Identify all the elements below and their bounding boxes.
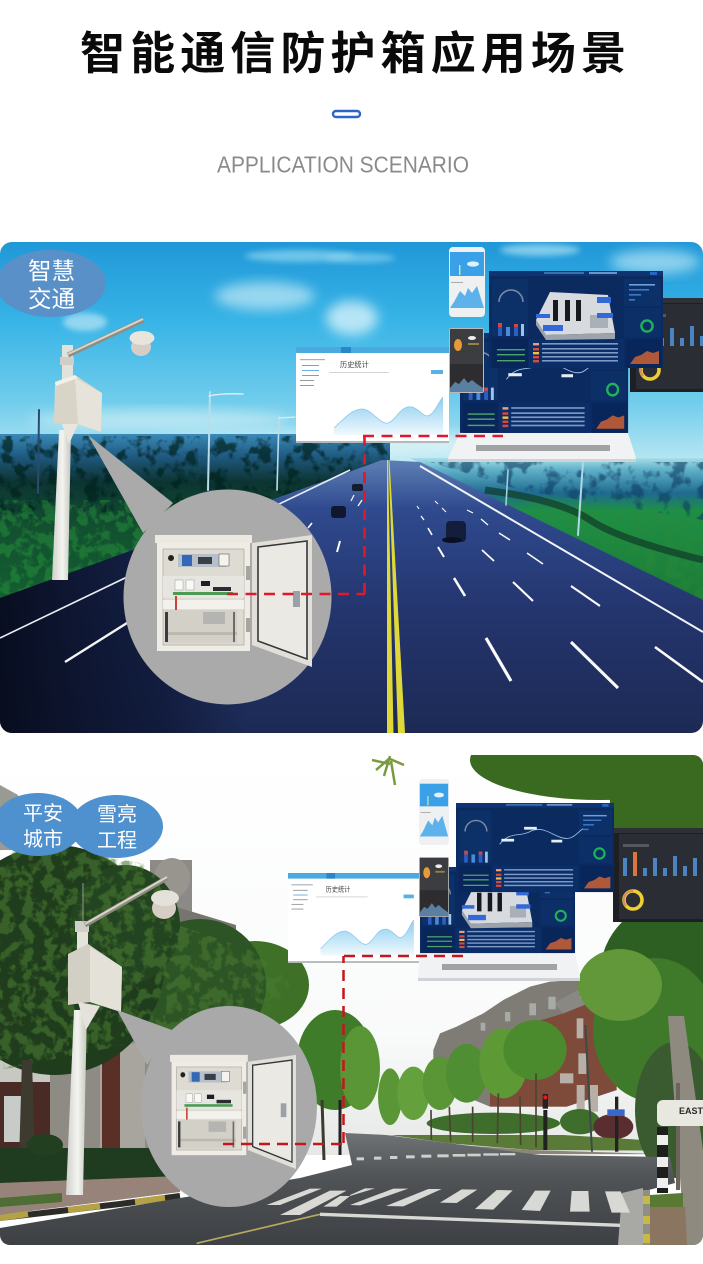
magnifier callout with cabinet xyxy=(117,1006,317,1207)
red dashed connection xyxy=(223,956,464,1144)
road markings xyxy=(0,460,703,733)
phone with chart xyxy=(449,247,485,317)
magnifier callout with cabinet xyxy=(88,435,332,704)
panel: smart traffic scene xyxy=(0,242,703,733)
highway road surface xyxy=(0,460,703,733)
speech bubble: snow bright project: 雪亮 xyxy=(97,803,137,826)
right row of trees xyxy=(378,1020,670,1154)
bright sky xyxy=(306,1048,645,1155)
left field and trees xyxy=(0,434,390,604)
dark monitor xyxy=(630,298,703,392)
crosswalk and road lines xyxy=(197,1153,630,1243)
upper dashboard xyxy=(456,803,614,892)
phone with alarm xyxy=(449,328,484,393)
speech bubble: smart traffic xyxy=(0,250,106,317)
street lamps xyxy=(38,392,583,535)
left building xyxy=(0,785,240,1160)
speech bubble: safe city: 平安 xyxy=(23,802,63,825)
sky with clouds xyxy=(0,242,703,472)
phone with alarm xyxy=(419,857,449,917)
decorative blue pill xyxy=(333,111,360,117)
laptop base xyxy=(418,953,580,981)
speech bubble: snow bright project: 工程 xyxy=(97,829,137,852)
software screens group 2 xyxy=(288,779,703,981)
far brick building with dormers xyxy=(433,980,617,1112)
title: 智能通信防护箱应用场景 xyxy=(80,28,626,79)
mid left tree by the callout xyxy=(297,1010,380,1160)
subtitle: APPLICATION SCENARIO xyxy=(217,152,469,178)
speech bubble: safe city xyxy=(0,793,83,856)
vehicles on highway xyxy=(331,484,466,543)
phone with chart xyxy=(419,779,449,845)
right field and trees xyxy=(410,458,703,604)
speech bubble: snow bright project xyxy=(70,795,163,858)
hedge and pavement xyxy=(0,1134,180,1218)
dark monitor xyxy=(613,828,703,922)
speech bubble: smart traffic: 智慧 xyxy=(28,258,75,284)
big tree at right xyxy=(372,720,703,1245)
camera pole with enclosure xyxy=(66,877,179,1195)
laptop dashboard xyxy=(460,333,628,433)
upper dashboard xyxy=(489,271,663,368)
laptop base xyxy=(448,433,636,462)
street sign: EAST xyxy=(679,1106,703,1116)
street sign xyxy=(657,1100,703,1126)
left tree canopy xyxy=(0,846,309,1148)
panel: safe city scene xyxy=(0,720,703,1245)
report window xyxy=(296,347,449,443)
red dashed connection xyxy=(227,436,503,594)
camera pole with enclosure xyxy=(52,319,154,580)
speech bubble: smart traffic: 交通 xyxy=(28,286,75,312)
laptop dashboard xyxy=(420,867,575,953)
speech bubble: safe city: 城市 xyxy=(23,828,63,851)
report window xyxy=(288,873,419,963)
street road surface xyxy=(0,1127,703,1245)
software screens group 1 xyxy=(296,247,703,462)
